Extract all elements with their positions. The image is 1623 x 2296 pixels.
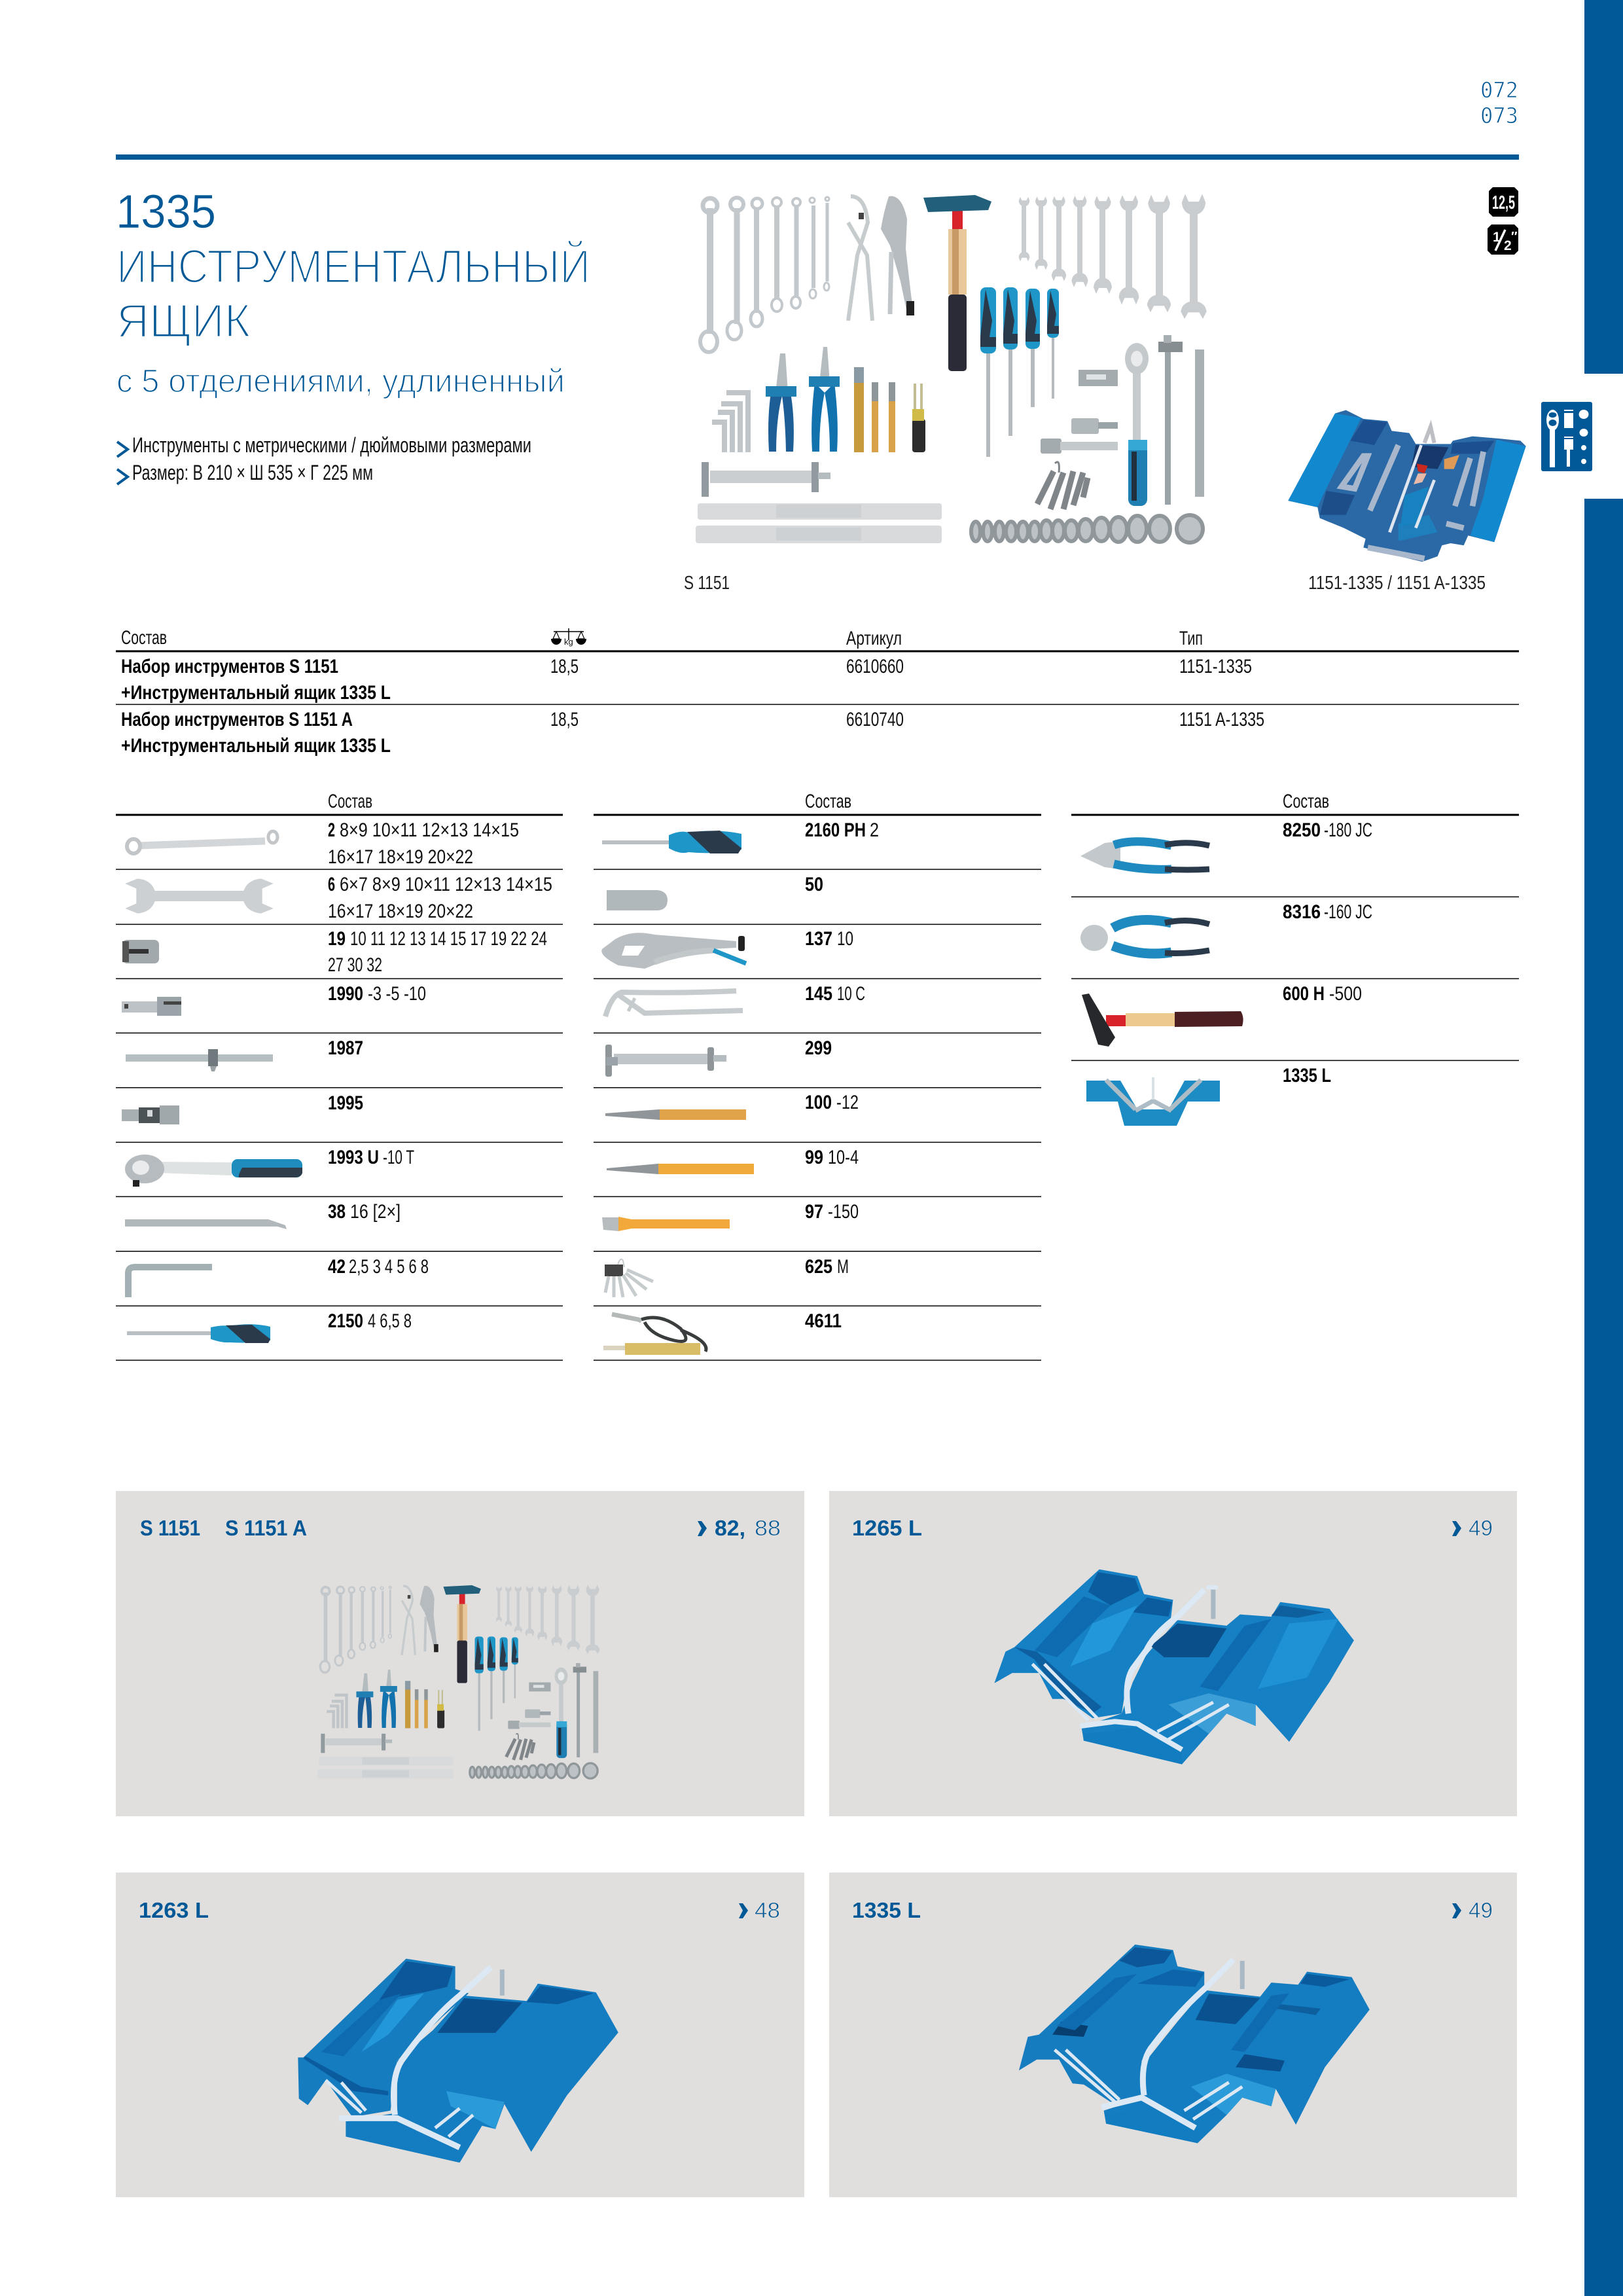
row: 1993 U ratchet: [125, 1147, 414, 1187]
page numbers: [1480, 77, 1518, 128]
row: 8250 combination pliers: 8250: [1283, 819, 1321, 841]
row: 6 open-end wrench: 16×17 18×19 20×22: [328, 901, 473, 922]
row: 19 socket: 10 11 12 13 14 15 17 19 22 24: [350, 928, 547, 950]
row: 97 chisel: -150: [828, 1201, 859, 1223]
row: 2150 screwdriver: 2150: [328, 1310, 363, 1332]
panel: S 1151: [116, 1491, 804, 1816]
T-handle 299: [702, 462, 830, 497]
icon: bullet chevron 2: [117, 469, 128, 484]
row: 299 T-bar: 299: [805, 1037, 832, 1059]
page numbers: 073: [1480, 103, 1518, 128]
row: 38 tommy bar: 16 [2×]: [350, 1201, 401, 1223]
badge 1/2 inch: 1: [1493, 230, 1501, 245]
tool set S 1151 illustration: [696, 194, 1207, 543]
row: 6 open-end wrench: 6×7 8×9 10×11 12×13 14×15: [340, 874, 552, 895]
table row 1: 6610660: [846, 656, 904, 677]
extension bars: [1158, 335, 1204, 505]
table row 2: 6610740: [846, 709, 904, 730]
row: 19 socket: [122, 928, 547, 976]
row: 600 H hammer: -500: [1329, 983, 1362, 1005]
panel: 1263 L: [116, 1873, 804, 2197]
page reference: [1452, 1516, 1493, 1540]
row: 38 tommy bar: [125, 1201, 401, 1229]
column header: Состав: [328, 791, 372, 812]
row: 1987 sliding T-bar: [126, 1037, 363, 1071]
row: 6 open-end wrench: [125, 874, 552, 922]
panel title 2: S 1151 A: [225, 1516, 307, 1540]
panel title: 1263 L: [139, 1898, 209, 1922]
column header: Состав: [1283, 791, 1329, 812]
table header: Тип: [1179, 628, 1203, 649]
row: 600 H hammer: [1082, 983, 1362, 1047]
row: 1993 U ratchet: -10 T: [383, 1147, 414, 1168]
row: 97 chisel: [602, 1201, 859, 1231]
photo: filled tool box: [1288, 410, 1526, 562]
row: 2160 PH screwdriver: 2: [870, 819, 879, 841]
table row 2: 1151 A-1335: [1179, 709, 1264, 730]
row: 1995 universal joint: 1995: [328, 1092, 363, 1114]
title: line 1: ИНСТРУМЕНТАЛЬНЫЙ: [116, 240, 590, 293]
row: 38 tommy bar: 38: [328, 1201, 346, 1223]
row: 50 adapter: [607, 874, 823, 910]
table: set composition: [116, 627, 1519, 757]
row: 100 punch: 100: [805, 1092, 832, 1113]
badge 1/2 inch: ″: [1511, 230, 1518, 244]
tool box 1265 L: [994, 1570, 1354, 1765]
row: 625 feeler gauge: 625: [805, 1256, 832, 1278]
page reference: [698, 1516, 781, 1540]
row: 2160 PH screwdriver: [602, 819, 879, 853]
open-end wrenches: [1019, 194, 1207, 319]
tool box 1263 L: [298, 1959, 618, 2162]
row: 1987 sliding T-bar: 1987: [328, 1037, 363, 1059]
row: 99 punch: [607, 1147, 859, 1174]
table row 1: 1151-1335: [1179, 656, 1252, 677]
row: 2160 PH screwdriver: 2160 PH: [805, 819, 866, 841]
table row 1: +Инструментальный ящик 1335 L: [121, 682, 391, 704]
row: 50 adapter: 50: [805, 874, 823, 895]
row: 1990 extension: [122, 983, 426, 1016]
badge 12,5: 12,5: [1492, 192, 1515, 213]
panel title: 1265 L: [852, 1516, 922, 1540]
row: 1990 extension: -3 -5 -10: [368, 983, 426, 1005]
panel: 1335 L: [829, 1873, 1517, 2197]
pliers pair: [766, 347, 840, 452]
row: 4611 test lamp: [603, 1310, 842, 1355]
title: product number: 1335: [116, 186, 216, 238]
sockets and adapters: [1041, 370, 1118, 454]
row: 137 locking pliers: [601, 928, 853, 969]
tool set thumbnail: [317, 1585, 599, 1779]
row: 19 socket: 27 30 32: [328, 954, 382, 976]
table header: Состав: [121, 627, 167, 649]
page reference: [739, 1898, 780, 1922]
row: 2 combination wrench: [127, 819, 519, 868]
locking pliers: [881, 196, 914, 315]
row: 2150 screwdriver: 4 6,5 8: [368, 1310, 412, 1332]
title: line 2: ЯЩИК: [116, 295, 251, 348]
page reference: [1452, 1898, 1493, 1922]
right side tab bar: upper: [1584, 0, 1623, 374]
table row 2: [121, 709, 1264, 757]
row: 137 locking pliers: 137: [805, 928, 832, 950]
row: 1335 L tool box: 1335 L: [1283, 1065, 1331, 1086]
row: 1990 extension: 1990: [328, 983, 363, 1005]
row: 2 combination wrench: 16×17 18×19 20×22: [328, 846, 473, 868]
screwdrivers: [980, 287, 1059, 457]
row: 8316 side cutters: -160 JC: [1324, 901, 1372, 923]
table row 2: 18,5: [550, 709, 579, 730]
bullet text 2: Размер: В 210 × Ш 535 × Г 225 мм: [132, 461, 373, 484]
page reference: 48: [755, 1898, 780, 1922]
row: 8250 combination pliers: [1080, 819, 1372, 870]
page reference: 88: [755, 1516, 781, 1540]
page reference: 82,: [715, 1516, 745, 1540]
row: 1335 L tool box: [1086, 1065, 1331, 1126]
row: 42 hex key: 2,5 3 4 5 6 8: [349, 1256, 429, 1278]
row: 625 feeler gauge: [605, 1256, 849, 1297]
page numbers: 072: [1480, 77, 1518, 103]
ratchet: [1125, 343, 1149, 506]
row: 600 H hammer: 600 H: [1283, 983, 1325, 1005]
contents column 2: [594, 791, 1041, 1361]
page reference: 49: [1469, 1898, 1493, 1922]
icon: weight scale: kg: [564, 637, 573, 647]
page reference: 49: [1469, 1516, 1493, 1540]
table row 2: Набор инструментов S 1151 A: [121, 709, 353, 730]
badge 12,5: [1489, 187, 1518, 217]
label S 1151: S 1151: [684, 573, 730, 594]
hex keys: [712, 393, 748, 452]
right side tab bar: lower: [1584, 499, 1623, 2296]
label 1151-1335 / 1151 A-1335: 1151-1335 / 1151 A-1335: [1308, 573, 1486, 594]
row: 42 hex key: 42: [328, 1256, 346, 1278]
row: 100 punch: -12: [836, 1092, 859, 1113]
feeler gauge: [1037, 462, 1088, 509]
row: 299 T-bar: [605, 1037, 832, 1077]
row: 2 combination wrench: 2: [328, 819, 335, 841]
ring wrenches: [700, 197, 829, 352]
row: 145 water pump pliers: [605, 983, 865, 1016]
contents column 3: [1071, 791, 1519, 1126]
table header: [121, 627, 1203, 649]
voltage tester: [912, 384, 925, 452]
row: 99 punch: 10-4: [828, 1147, 859, 1168]
contents column 1: [116, 791, 563, 1361]
row: 625 feeler gauge: M: [837, 1256, 849, 1278]
row: 8316 side cutters: 8316: [1283, 901, 1321, 923]
column header: Состав: [805, 791, 851, 812]
row: 8250 combination pliers: -180 JC: [1324, 819, 1372, 841]
hammer: [923, 195, 991, 371]
row: 100 punch: [605, 1092, 859, 1120]
row: 6 open-end wrench: 6: [328, 874, 335, 895]
table row 1: Набор инструментов S 1151: [121, 656, 338, 677]
tool box 1335 L: [1019, 1945, 1370, 2143]
row: 97 chisel: 97: [805, 1201, 823, 1223]
panel title: S 1151: [140, 1516, 200, 1540]
table row 1: [121, 656, 1252, 704]
icon: sockets category: [1541, 402, 1592, 471]
row: 19 socket: 19: [328, 928, 346, 950]
subtitle: с 5 отделениями, удлиненный: [116, 363, 565, 399]
header rule: [116, 154, 1519, 160]
table row 2: +Инструментальный ящик 1335 L: [121, 735, 391, 757]
badge 1/2 inch: 2: [1504, 238, 1512, 253]
row: 8316 side cutters: [1080, 901, 1372, 954]
row: 145 water pump pliers: 10 C: [837, 983, 865, 1005]
table row 1: 18,5: [550, 656, 579, 677]
row: 1995 universal joint: [122, 1092, 363, 1124]
bullet list: [117, 433, 531, 484]
panel title: 1335 L: [852, 1898, 921, 1922]
icon: bullet chevron 1: [117, 442, 128, 457]
table header: Артикул: [846, 628, 902, 649]
socket row: [971, 515, 1203, 543]
bullet text 1: Инструменты с метрическими / дюймовыми размерами: [132, 433, 531, 457]
chisels: [854, 367, 895, 452]
badge 1/2 inch: [1488, 224, 1518, 255]
row: 145 water pump pliers: 145: [805, 983, 832, 1005]
row: 2150 screwdriver: [127, 1310, 412, 1343]
row: 137 locking pliers: 10: [837, 928, 853, 950]
row: 42 hex key: [128, 1256, 429, 1297]
tommy bars: [696, 503, 942, 543]
panel: 1265 L: [829, 1491, 1517, 1816]
icon: weight scale: [551, 628, 586, 647]
row: 2 combination wrench: 8×9 10×11 12×13 14×15: [340, 819, 519, 841]
water pump pliers: [848, 196, 872, 321]
row: 1993 U ratchet: 1993 U: [328, 1147, 379, 1168]
row: 99 punch: 99: [805, 1147, 823, 1168]
row: 4611 test lamp: 4611: [805, 1310, 842, 1332]
